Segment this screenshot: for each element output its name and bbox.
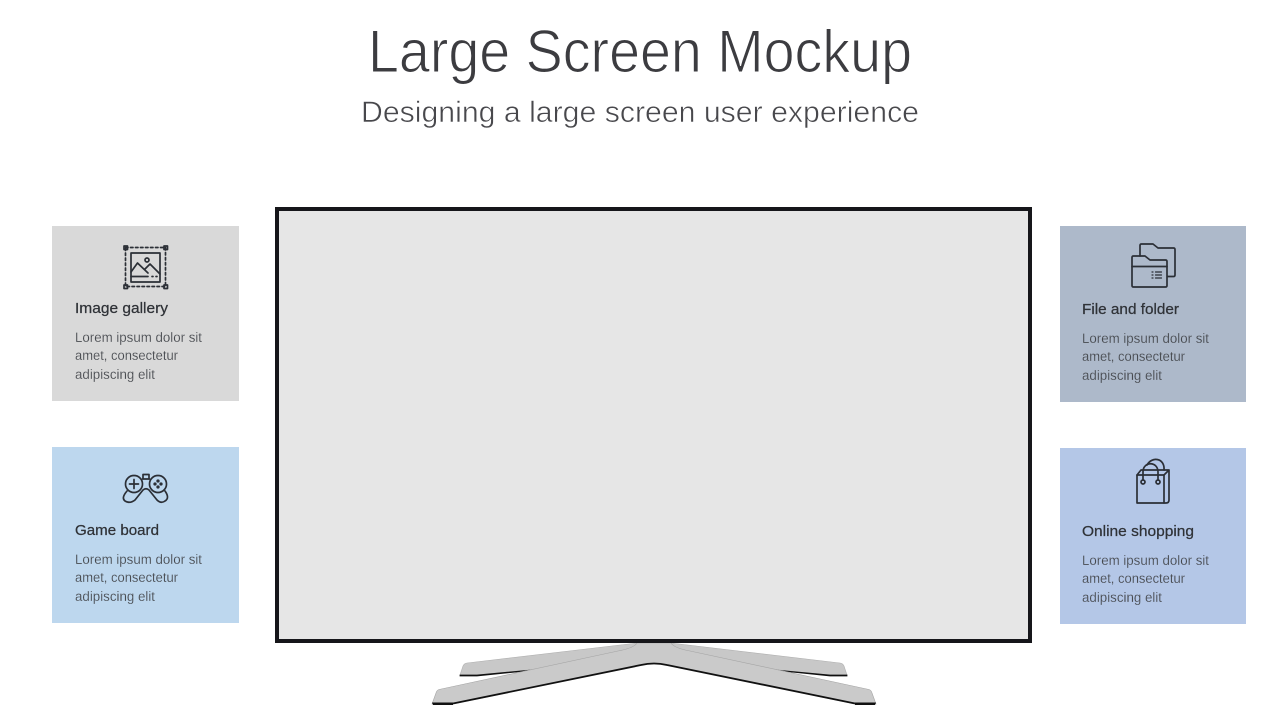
text: image gallery description: amet, consectetur xyxy=(75,348,178,363)
icon: shopping bag xyxy=(1137,459,1169,503)
text: file and folder description: adipiscing elit xyxy=(1082,368,1162,383)
text: online shopping description: Lorem ipsum dolor sit xyxy=(1082,553,1209,568)
heading: image gallery: Image gallery xyxy=(75,300,169,317)
stand shadow edges and feet xyxy=(432,664,876,705)
tv screen xyxy=(277,209,1030,641)
heading: game board: Game board xyxy=(75,522,159,539)
panel: game board xyxy=(52,447,239,623)
panel: online shopping xyxy=(1060,448,1246,624)
subtitle: Designing a large screen user experience xyxy=(361,96,919,129)
heading: file and folder: File and folder xyxy=(1082,301,1179,318)
text: game board description: adipiscing elit xyxy=(75,589,155,604)
front legs and neck xyxy=(432,643,876,704)
text: online shopping description: amet, consectetur xyxy=(1082,571,1185,586)
text: file and folder description: Lorem ipsum dolor sit xyxy=(1082,331,1209,346)
text: file and folder description xyxy=(1082,331,1209,383)
text: online shopping description: adipiscing elit xyxy=(1082,590,1162,605)
text: image gallery description: Lorem ipsum dolor sit xyxy=(75,330,202,345)
icon: image gallery xyxy=(124,246,168,288)
text: file and folder description: amet, consectetur xyxy=(1082,349,1185,364)
text: image gallery description xyxy=(75,330,202,382)
panel: image gallery xyxy=(52,226,239,401)
title: Large Screen Mockup xyxy=(368,18,912,85)
text: game board description: Lorem ipsum dolor sit xyxy=(75,552,202,567)
icon: game controller xyxy=(123,474,168,502)
text: game board description: amet, consectetur xyxy=(75,570,178,585)
text: game board description xyxy=(75,552,202,604)
icon: folders xyxy=(1132,244,1175,287)
text: online shopping description xyxy=(1082,553,1209,605)
back legs xyxy=(460,643,847,676)
text: image gallery description: adipiscing elit xyxy=(75,367,155,382)
tv stand xyxy=(432,643,876,705)
heading: online shopping: Online shopping xyxy=(1082,523,1194,540)
panel: file and folder xyxy=(1060,226,1246,402)
